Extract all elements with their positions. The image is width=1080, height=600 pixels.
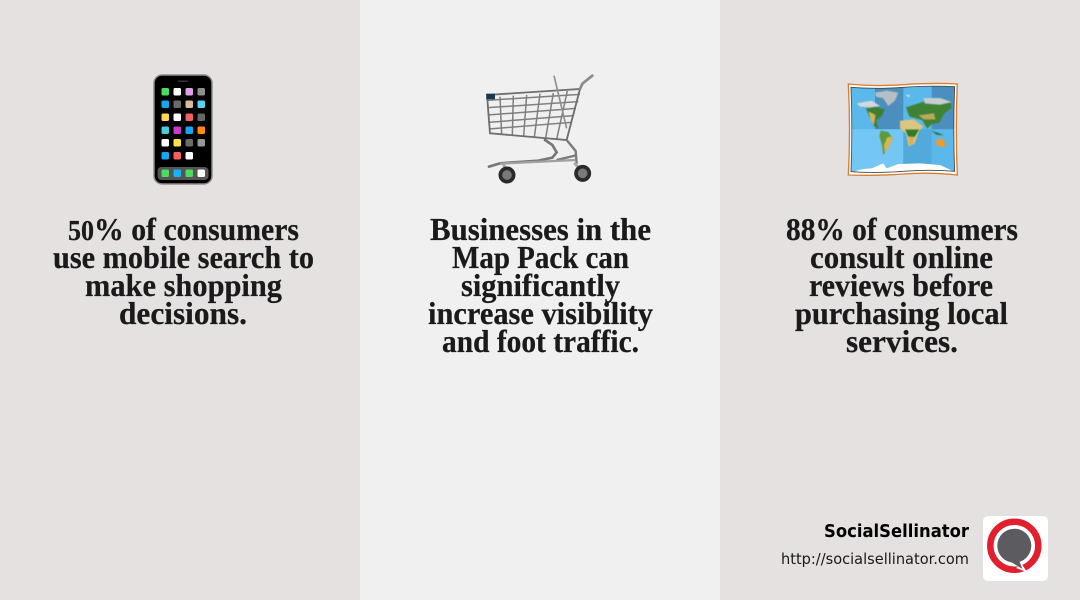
heading: map pack stat	[428, 211, 653, 359]
heading: mobile search stat: 50% of consumers	[68, 211, 299, 247]
heading: mobile search stat: make shopping	[85, 267, 282, 303]
heading: map pack stat: Businesses in the	[430, 211, 651, 247]
heading: online reviews stat: reviews before	[809, 267, 993, 303]
icon: smartphone	[154, 75, 212, 184]
panel: map pack	[360, 0, 720, 600]
icon: shopping cart	[486, 76, 592, 182]
heading: online reviews stat: purchasing local	[795, 295, 1008, 331]
heading: map pack stat: increase visibility	[428, 295, 653, 331]
logo	[983, 516, 1048, 581]
panel: mobile search	[0, 0, 360, 600]
icon: world map	[848, 83, 957, 175]
heading: online reviews stat: services.	[846, 323, 958, 359]
heading: online reviews stat: consult online	[810, 239, 993, 275]
brand url: http://socialsellinator.com	[781, 550, 969, 568]
heading: mobile search stat: decisions.	[119, 295, 247, 331]
heading: map pack stat: Map Pack can	[452, 239, 629, 275]
brand name: SocialSellinator	[824, 521, 969, 542]
heading: mobile search stat: use mobile search to	[53, 239, 314, 275]
heading: online reviews stat: 88% of consumers	[786, 211, 1018, 247]
heading: online reviews stat	[786, 211, 1018, 359]
panel: online reviews	[720, 0, 1080, 600]
heading: map pack stat: significantly	[461, 267, 620, 303]
heading: mobile search stat	[53, 211, 314, 331]
heading: map pack stat: and foot traffic.	[442, 323, 639, 359]
